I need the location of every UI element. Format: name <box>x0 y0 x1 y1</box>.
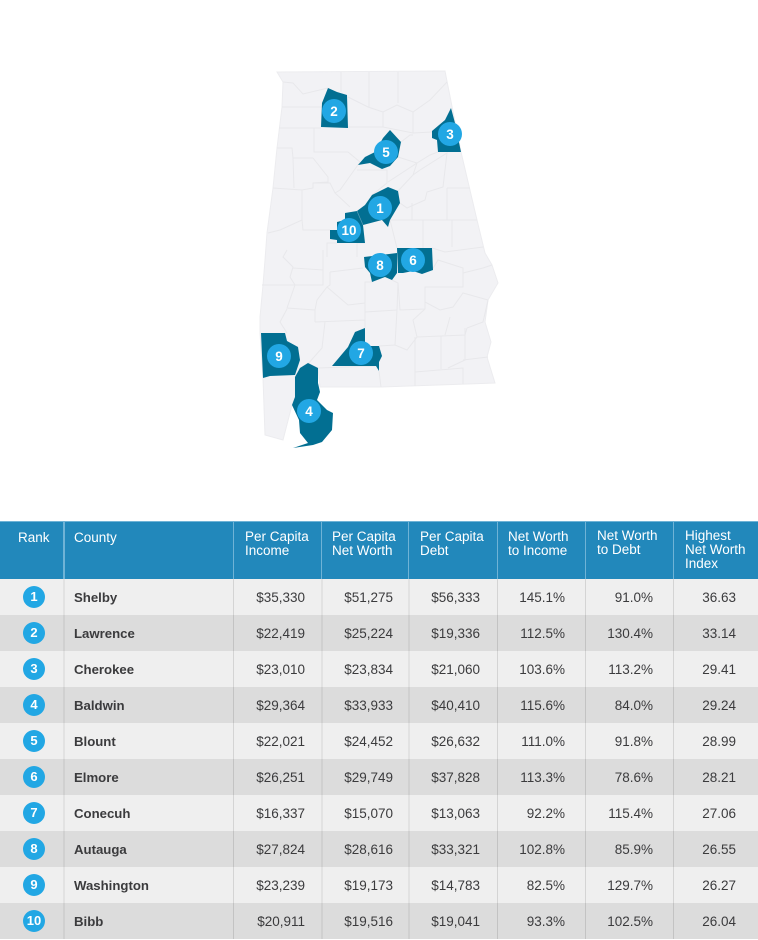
county boundaries <box>262 72 492 387</box>
county: Washington <box>261 333 300 378</box>
header: rank: Rank <box>18 530 50 545</box>
row 9: Washington: $14,783 <box>431 878 480 893</box>
header: index: Index <box>685 556 718 571</box>
row 7: Conecuh: 7 <box>30 805 38 820</box>
county: Conecuh <box>332 328 382 371</box>
row 4: Baldwin: 115.6% <box>520 698 565 713</box>
row 7: Conecuh: $13,063 <box>431 806 480 821</box>
county: Elmore <box>397 248 433 274</box>
county: Autauga <box>364 253 397 282</box>
row 3: Cherokee: $23,010 <box>256 662 305 677</box>
row 6: Elmore: 6 <box>30 769 38 784</box>
header: debt <box>420 529 484 558</box>
row 4: Baldwin: $33,933 <box>344 698 393 713</box>
header: net worth to income <box>508 529 569 558</box>
row 4: Baldwin: $29,364 <box>256 698 305 713</box>
row 8: Autauga: 26.55 <box>702 842 736 857</box>
row 8: Autauga: $27,824 <box>256 842 305 857</box>
row 1: Shelby <box>0 579 758 615</box>
row 5: Blount: 28.99 <box>702 734 736 749</box>
header: net worth to debt: to Debt <box>597 542 641 557</box>
row 10: Bibb: $19,516 <box>344 914 393 929</box>
row 5: Blount: $26,632 <box>431 734 480 749</box>
row 6: Elmore: Elmore <box>74 770 119 785</box>
row 9: Washington: 9 <box>30 877 38 892</box>
row 9: Washington: Washington <box>74 878 149 893</box>
row 6: Elmore: $29,749 <box>344 770 393 785</box>
map marker numbers: 6 <box>409 253 417 268</box>
map marker numbers: 5 <box>382 145 390 160</box>
row 3: Cherokee: 103.6% <box>519 662 565 677</box>
header: net worth: Net Worth <box>332 543 393 558</box>
row 1: Shelby: Shelby <box>74 590 117 605</box>
row 9: Washington <box>0 867 758 903</box>
header: income: Per Capita <box>245 529 309 544</box>
header: income <box>245 529 309 558</box>
row 9: Washington: $19,173 <box>344 878 393 893</box>
map marker numbers: 8 <box>376 258 384 273</box>
row 10: Bibb: Bibb <box>74 914 103 929</box>
row 4: Baldwin: Baldwin <box>74 698 125 713</box>
map marker numbers: 2 <box>330 104 338 119</box>
header: net worth to income: to Income <box>508 543 567 558</box>
header: income: Income <box>245 543 289 558</box>
header: net worth to income: Net Worth <box>508 529 569 544</box>
map marker numbers: 9 <box>275 349 283 364</box>
row 1: Shelby: $56,333 <box>431 590 480 605</box>
row 2: Lawrence: 33.14 <box>702 626 736 641</box>
row 9: Washington: 82.5% <box>527 878 565 893</box>
row 6: Elmore: 28.21 <box>702 770 736 785</box>
row 7: Conecuh: $15,070 <box>344 806 393 821</box>
map marker numbers: 3 <box>446 127 454 142</box>
row 8: Autauga: Autauga <box>74 842 127 857</box>
row 3: Cherokee: 113.2% <box>608 662 653 677</box>
row 2: Lawrence: $22,419 <box>256 626 305 641</box>
table header <box>0 521 758 579</box>
row 3: Cherokee: $23,834 <box>344 662 393 677</box>
county: Shelby <box>357 187 400 227</box>
row 6: Elmore <box>0 759 758 795</box>
row 1: Shelby: $35,330 <box>256 590 305 605</box>
row 7: Conecuh <box>0 795 758 831</box>
row 10: Bibb: 102.5% <box>607 914 653 929</box>
map: Alabama counties <box>260 70 498 448</box>
header: index <box>685 528 746 571</box>
row 3: Cherokee: $21,060 <box>431 662 480 677</box>
map marker numbers: 1 <box>376 201 384 216</box>
row 2: Lawrence: 112.5% <box>520 626 565 641</box>
row 2: Lawrence: $25,224 <box>344 626 393 641</box>
row 5: Blount: 91.8% <box>615 734 653 749</box>
row 7: Conecuh: 27.06 <box>702 806 736 821</box>
row 2: Lawrence: 2 <box>30 625 38 640</box>
row 5: Blount: 5 <box>30 733 38 748</box>
header: debt: Per Capita <box>420 529 484 544</box>
row 2: Lawrence: $19,336 <box>431 626 480 641</box>
row 1: Shelby: 91.0% <box>615 590 653 605</box>
county: Bibb <box>330 211 365 243</box>
county: Baldwin <box>292 363 333 448</box>
county: Cherokee <box>432 108 461 152</box>
row 4: Baldwin: 29.24 <box>702 698 736 713</box>
header: net worth <box>332 529 396 558</box>
row 10: Bibb <box>0 903 758 939</box>
row 10: Bibb: 10 <box>27 913 41 928</box>
row 10: Bibb: 26.04 <box>702 914 736 929</box>
row 8: Autauga: 102.8% <box>519 842 565 857</box>
row 9: Washington: 129.7% <box>607 878 653 893</box>
row 10: Bibb: 93.3% <box>527 914 565 929</box>
row 8: Autauga: $28,616 <box>344 842 393 857</box>
row 8: Autauga: $33,321 <box>431 842 480 857</box>
header: index: Highest <box>685 528 731 543</box>
row 2: Lawrence <box>0 615 758 651</box>
row 3: Cherokee: 29.41 <box>702 662 736 677</box>
row 3: Cherokee: 3 <box>30 661 38 676</box>
row 10: Bibb: $19,041 <box>431 914 480 929</box>
row 10: Bibb: $20,911 <box>257 914 305 929</box>
row 7: Conecuh: Conecuh <box>74 806 130 821</box>
row 5: Blount: $24,452 <box>344 734 393 749</box>
row 5: Blount <box>0 723 758 759</box>
header: debt: Debt <box>420 543 449 558</box>
row 8: Autauga: 85.9% <box>615 842 653 857</box>
row 8: Autauga <box>0 831 758 867</box>
row 4: Baldwin <box>0 687 758 723</box>
row 8: Autauga: 8 <box>30 841 38 856</box>
header: index: Net Worth <box>685 542 746 557</box>
row 6: Elmore: 78.6% <box>615 770 653 785</box>
Shelby and Bibb shared border <box>357 211 363 225</box>
county: Blount <box>358 130 401 169</box>
row 4: Baldwin: 84.0% <box>615 698 653 713</box>
row 7: Conecuh: $16,337 <box>256 806 305 821</box>
map marker numbers <box>275 104 454 419</box>
map marker numbers: 7 <box>357 346 365 361</box>
row 1: Shelby: 145.1% <box>519 590 565 605</box>
map markers <box>267 99 462 423</box>
row 6: Elmore: 113.3% <box>520 770 565 785</box>
row 4: Baldwin: $40,410 <box>431 698 480 713</box>
row 6: Elmore: $37,828 <box>431 770 480 785</box>
row 5: Blount: 111.0% <box>521 734 565 749</box>
row 3: Cherokee: Cherokee <box>74 662 134 677</box>
row 9: Washington: $23,239 <box>256 878 305 893</box>
state outline <box>260 71 498 440</box>
row 2: Lawrence: Lawrence <box>74 626 135 641</box>
row 3: Cherokee <box>0 651 758 687</box>
row 1: Shelby: 1 <box>30 589 38 604</box>
map marker numbers: 4 <box>305 404 313 419</box>
row 4: Baldwin: 4 <box>30 697 38 712</box>
header: county: County <box>74 530 117 545</box>
row 5: Blount: $22,021 <box>256 734 305 749</box>
row 1: Shelby: $51,275 <box>344 590 393 605</box>
row 5: Blount: Blount <box>74 734 116 749</box>
row 6: Elmore: $26,251 <box>256 770 305 785</box>
row 1: Shelby: 36.63 <box>702 590 736 605</box>
header: net worth to debt <box>597 528 658 557</box>
row 2: Lawrence: 130.4% <box>607 626 653 641</box>
map marker numbers: 10 <box>341 223 357 238</box>
county: Lawrence <box>321 88 348 128</box>
header: net worth: Per Capita <box>332 529 396 544</box>
row 9: Washington: 26.27 <box>702 878 736 893</box>
row 7: Conecuh: 115.4% <box>608 806 653 821</box>
header: net worth to debt: Net Worth <box>597 528 658 543</box>
row 7: Conecuh: 92.2% <box>527 806 565 821</box>
